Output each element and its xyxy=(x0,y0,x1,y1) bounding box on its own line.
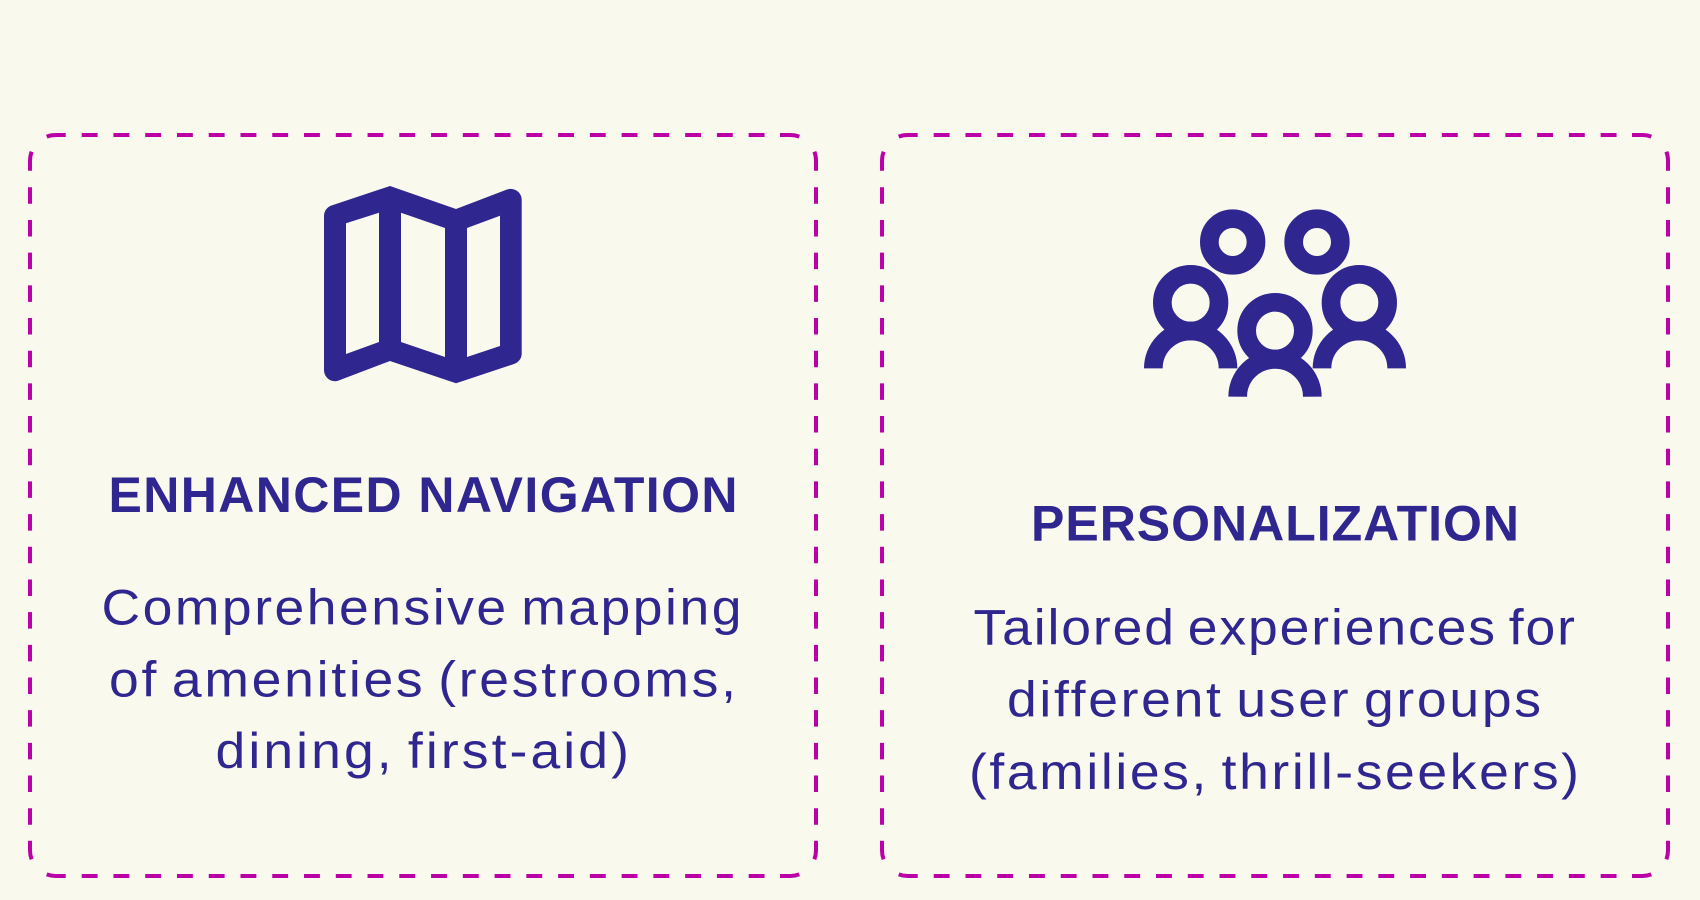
icon: group of people xyxy=(1153,219,1397,397)
text block: personalization description: different user groups xyxy=(1007,671,1541,727)
text block: navigation description: dining, first-aid) xyxy=(216,723,629,779)
text block: personalization description: (families, thrill-seekers) xyxy=(969,743,1579,799)
panel: enhanced navigation xyxy=(30,135,816,876)
text block: navigation description: of amenities (restrooms, xyxy=(109,651,736,707)
heading: enhanced navigation: ENHANCED NAVIGATION xyxy=(108,467,738,523)
text block: personalization description: Tailored experiences for xyxy=(974,599,1575,655)
panel border: dashed rounded frame xyxy=(882,135,1668,876)
text block: personalization description xyxy=(969,599,1579,799)
text block: navigation description xyxy=(102,579,741,779)
heading: personalization: PERSONALIZATION xyxy=(1031,495,1519,551)
icon: folded map xyxy=(324,186,522,383)
text block: navigation description: Comprehensive mapping xyxy=(102,579,741,635)
panel border: dashed rounded frame xyxy=(30,135,816,876)
panel: personalization xyxy=(882,135,1668,876)
